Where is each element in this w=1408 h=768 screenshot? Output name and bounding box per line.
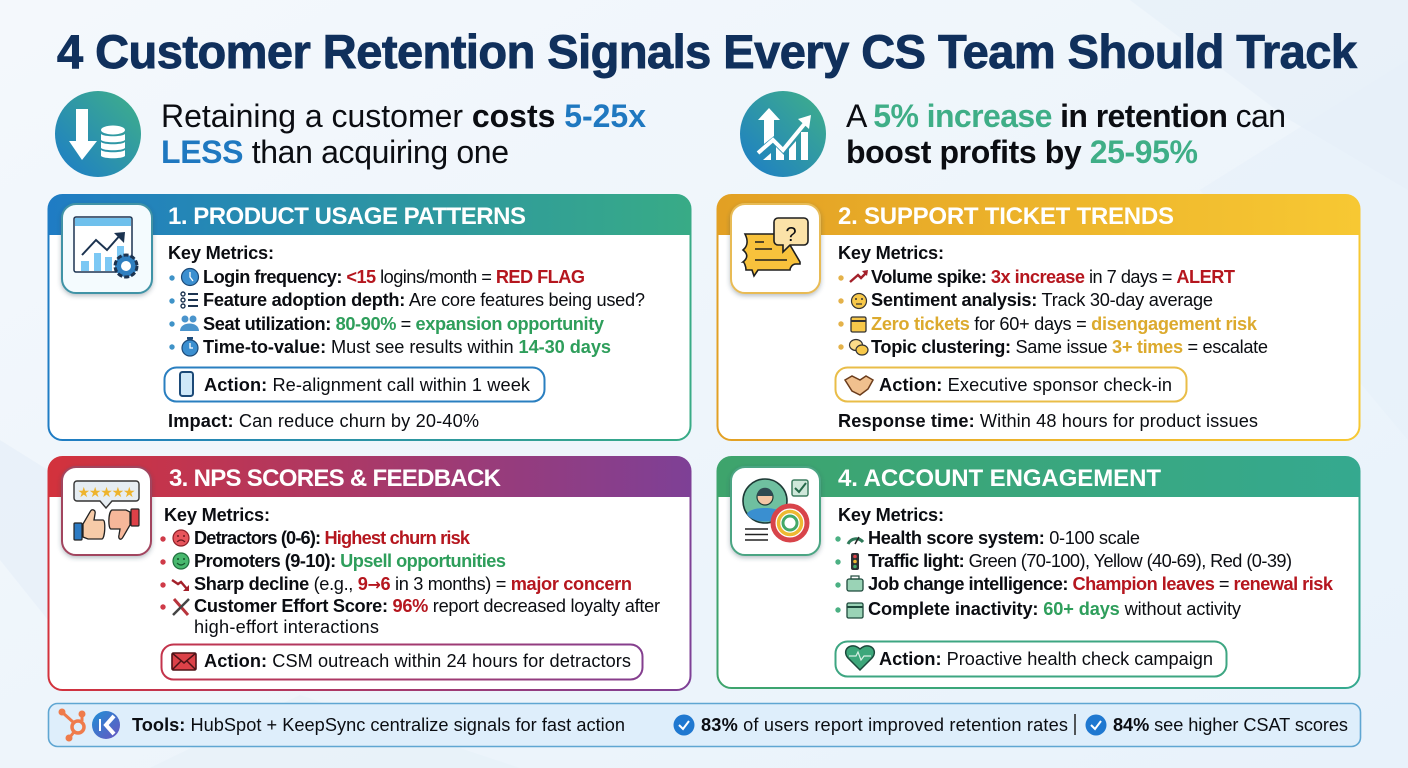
metric: time to value: Time-to-value: Must see results within 14-30 days (203, 337, 611, 357)
heading: 3. NPS SCORES & FEEDBACK (169, 465, 502, 492)
action pill: Action: Re-alignment call within 1 week (204, 375, 531, 395)
icon: hubspot (60, 710, 84, 740)
heading: 2. SUPPORT TICKET TRENDS (838, 203, 1174, 230)
key metrics (160, 505, 660, 637)
metric: job change: Job change intelligence: Champion leaves = renewal risk (868, 574, 1334, 594)
icon tile: support chat: ? (785, 224, 797, 246)
text: retention cost: LESS than acquiring one (161, 134, 509, 170)
key metrics: Key Metrics: (838, 505, 944, 525)
icon tile: support chat (731, 204, 820, 293)
key metrics (835, 505, 1334, 619)
text: profit boost: boost profits by 25-95% (846, 134, 1198, 170)
metric: promoters: Promoters (9-10): Upsell opportunities (194, 551, 506, 571)
icon tile: ratings and thumbs: ★★★★★ (78, 485, 136, 501)
panel: account engagement (717, 457, 1360, 688)
action pill (164, 368, 544, 402)
metric: complete inactivity: Complete inactivity: 60+ days without activity (868, 599, 1242, 619)
key metrics: Key Metrics: (838, 243, 944, 263)
icon tile: analytics window (62, 204, 152, 293)
text: retention cost: Retaining a customer costs 5-25x (161, 98, 646, 134)
panel: nps scores and feedback (48, 457, 691, 690)
header band (48, 195, 691, 235)
tools text: Tools: HubSpot + KeepSync centralize signals for fast action (132, 715, 625, 735)
header band (48, 457, 691, 497)
action pill (836, 368, 1186, 402)
metric: login frequency: Login frequency: <15 logins/month = RED FLAG (203, 267, 585, 287)
heading: 1. PRODUCT USAGE PATTERNS (168, 203, 526, 230)
key metrics (168, 243, 645, 357)
text: retention cost (161, 98, 646, 170)
metric: detractors: Detractors (0-6): Highest churn risk (194, 528, 471, 548)
metric: topic clustering: Topic clustering: Same issue 3+ times = escalate (871, 337, 1268, 357)
metric: customer effort score (160, 596, 660, 637)
metric: sentiment: Sentiment analysis: Track 30-day average (871, 290, 1213, 310)
text: profit boost: A 5% increase in retention can (846, 98, 1286, 134)
metric: sharp decline: Sharp decline (e.g., 9→6 in 3 months) = major concern (194, 574, 632, 594)
icon tile: health dashboard (731, 467, 820, 555)
metric: health score: Health score system: 0-100 scale (868, 528, 1140, 548)
stat: profit boost (740, 91, 1286, 177)
icon: keepsync (92, 711, 120, 739)
title: 4 Customer Retention Signals Every CS Team Should Track (57, 25, 1358, 78)
action pill (162, 644, 642, 680)
metric: volume spike: Volume spike: 3x increase in 7 days = ALERT (871, 267, 1235, 287)
stat: higher csat: 84% see higher CSAT scores (1113, 715, 1348, 735)
impact: Impact: Can reduce churn by 20-40% (168, 411, 479, 431)
metric: zero tickets: Zero tickets for 60+ days = disengagement risk (871, 314, 1258, 334)
action pill: Action: CSM outreach within 24 hours for detractors (204, 651, 631, 671)
metric: traffic light: Traffic light: Green (70-100), Yellow (40-69), Red (0-39) (868, 551, 1292, 571)
text: profit boost (846, 98, 1286, 170)
action pill: Action: Executive sponsor check-in (879, 375, 1172, 395)
key metrics (838, 243, 1268, 357)
header band (717, 457, 1360, 497)
metric: seat utilization: Seat utilization: 80-90% = expansion opportunity (203, 314, 605, 334)
panel: support ticket trends (717, 195, 1360, 440)
action pill: Action: Proactive health check campaign (879, 649, 1213, 669)
icon: growth chart (740, 91, 826, 177)
action pill (836, 642, 1226, 676)
icon tile: ratings and thumbs (62, 467, 151, 555)
metric: feature adoption: Feature adoption depth: Are core features being used? (203, 290, 645, 310)
key metrics: Key Metrics: (164, 505, 270, 525)
stat: improved retention: 83% of users report improved retention rates (701, 715, 1068, 735)
header band (717, 195, 1360, 235)
heading: 4. ACCOUNT ENGAGEMENT (838, 465, 1161, 492)
response time: Response time: Within 48 hours for product issues (838, 411, 1258, 431)
metric: customer effort score: Customer Effort Score: 96% report decreased loyalty after (194, 596, 660, 616)
footer bar (48, 704, 1360, 746)
key metrics: Key Metrics: (168, 243, 274, 263)
metric: customer effort score: high-effort interactions (194, 617, 379, 637)
panel: product usage patterns (48, 195, 691, 440)
divider (1074, 714, 1076, 735)
icon: arrow down and coins (55, 91, 141, 177)
stat: retention cost (55, 91, 646, 177)
